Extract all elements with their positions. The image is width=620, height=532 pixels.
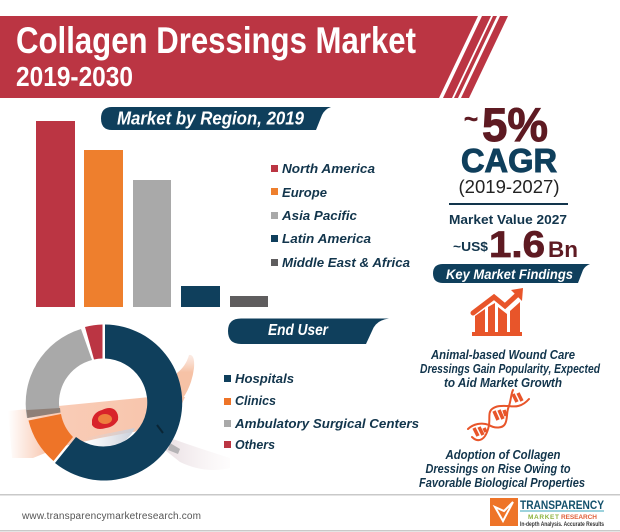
text: finding 1: to Aid Market Growth (444, 376, 562, 390)
legend: regions: North America (282, 161, 375, 176)
stat: CAGR: 5% (482, 98, 548, 151)
subtitle: 2019-2030 (16, 61, 133, 92)
legend: end users: Others (235, 437, 275, 452)
heading: market by region: Market by Region, 2019 (117, 108, 304, 128)
text: finding 1 (420, 348, 600, 390)
legend: end users: Ambulatory Surgical Centers (234, 416, 419, 431)
legend: regions: Asia Pacific (281, 208, 358, 223)
heading: end user: End User (268, 322, 329, 339)
stat: market value: 1.6 (489, 224, 545, 265)
logo: Transparency Market Research: In-depth Analysis. Accurate Results (520, 522, 605, 528)
stat: CAGR: ~ (464, 106, 478, 133)
legend: regions: Europe (282, 185, 327, 200)
logo: Transparency Market Research: RESEARCH (561, 514, 597, 521)
legend: end users: Hospitals (235, 371, 294, 386)
legend: regions: Middle East & Africa (282, 255, 410, 270)
logo: Transparency Market Research: MARKET (528, 514, 559, 521)
footer rules (0, 494, 620, 496)
footer url: www.transparencymarketresearch.com (21, 511, 201, 522)
stat: CAGR: (2019-2027) (458, 177, 560, 197)
stat: market value (449, 212, 578, 265)
stat: CAGR (458, 98, 560, 197)
text: finding 2 (419, 448, 585, 490)
logo: Transparency Market Research: TRANSPARENCY (520, 498, 604, 512)
logo: Transparency Market Research (490, 498, 605, 528)
text: finding 1: Animal-based Wound Care (430, 348, 575, 362)
stat: market value: ~US$ (453, 239, 489, 254)
illustration: arm with wound (8, 355, 230, 470)
legend: end users: Clinics (235, 393, 276, 408)
bar chart: market by region (36, 121, 268, 307)
heading: key market findings: Key Market Findings (446, 266, 573, 282)
stat: market value: Market Value 2027 (449, 212, 567, 227)
stat: market value: Bn (548, 237, 578, 262)
icon: DNA helix (468, 390, 529, 440)
donut chart: end user (26, 324, 182, 480)
icon: growth chart (472, 288, 523, 336)
wound (92, 408, 118, 429)
heading: end user (228, 318, 389, 344)
legend: end users (224, 371, 419, 452)
legend: regions (271, 161, 410, 270)
text: finding 2: Adoption of Collagen (445, 448, 561, 462)
text: finding 2: Dressings on Rise Owing to (426, 462, 571, 476)
stat: CAGR: CAGR (461, 142, 557, 179)
text: finding 2: Favorable Biological Properties (419, 476, 585, 490)
legend: regions: Latin America (282, 231, 371, 246)
header banner (0, 16, 508, 98)
title: Collagen Dressings Market (16, 20, 416, 61)
divider (449, 203, 568, 205)
